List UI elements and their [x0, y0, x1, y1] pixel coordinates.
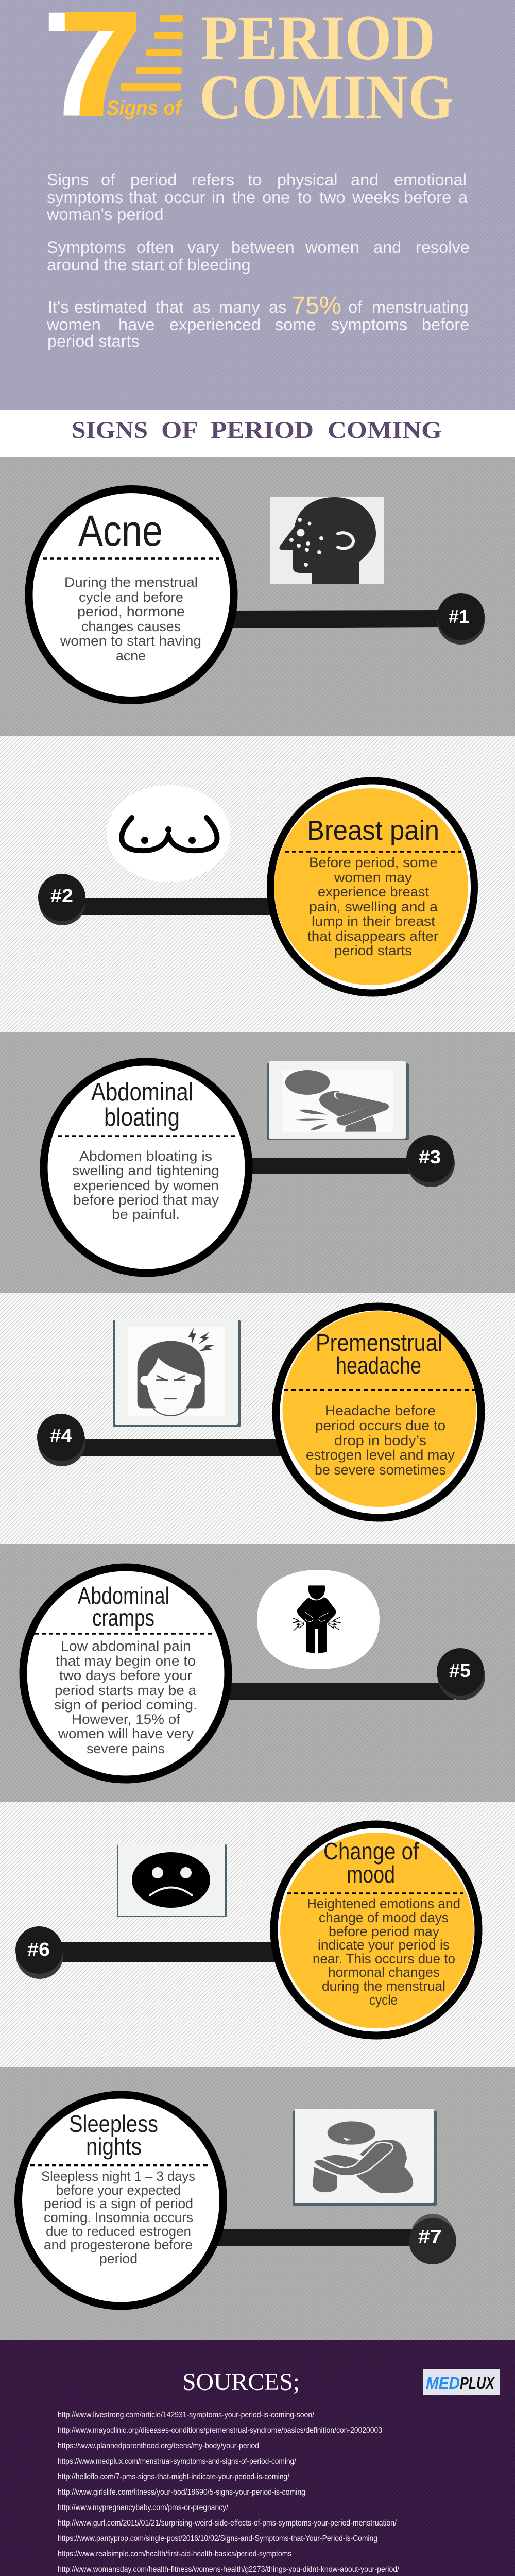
intro paragraph 3 with 75 percent highlight: as: [193, 298, 210, 316]
intro paragraph 3 with 75 percent highlight: symptoms: [331, 315, 407, 334]
body text: period is a sign of period: [44, 2196, 193, 2211]
intro paragraph 3 with 75 percent highlight: [46, 292, 469, 350]
source links list: http://www.mypregnancybaby.com/pms-or-pregnancy/: [58, 2503, 229, 2512]
body text: [60, 574, 201, 664]
circle card: acne: Acne: [78, 506, 163, 555]
circle card: sleepless nights: nights: [86, 2133, 142, 2160]
body text: that disappears after: [307, 928, 438, 944]
number badge 7: #7: [418, 2226, 442, 2247]
circle card: premenstrual headache: Premenstrual: [316, 1329, 442, 1356]
intro paragraph 2: vary: [187, 238, 219, 257]
intro paragraph 1: to: [248, 171, 262, 189]
source links list: http://www.livestrong.com/article/142931-symptoms-your-period-is-coming-soon/: [58, 2411, 315, 2419]
body text: [54, 1638, 197, 1756]
number badge 6: #6: [27, 1939, 50, 1960]
number badge 6: [15, 1926, 63, 1979]
source links list: http://www.girlslife.com/fitness/your-bod/18690/5-signs-your-period-is-coming: [58, 2488, 305, 2497]
intro paragraph 3 with 75 percent highlight: as: [269, 298, 286, 316]
body text: women may: [334, 870, 413, 885]
panel: breast pain: [0, 736, 515, 1032]
source links list: http://helloflo.com/7-pms-signs-that-might-indicate-your-period-is-coming/: [58, 2472, 290, 2481]
icon: person with cramps: [257, 1570, 380, 1669]
body text: before period that may: [73, 1192, 219, 1208]
body text: period: [99, 2251, 138, 2266]
intro paragraph 1: period: [130, 171, 177, 189]
intro paragraph 2: [47, 238, 470, 274]
intro paragraph 1: emotional: [394, 171, 467, 189]
number badge 2: [38, 874, 85, 925]
connector arm 1: [230, 610, 440, 628]
body text: near. This occurs due to: [313, 1951, 455, 1967]
icon: bloated abdomen: [267, 1061, 409, 1140]
body text: during the menstrual: [322, 1978, 445, 1994]
number badge 1: #1: [449, 606, 469, 627]
panel: change of mood: [0, 1802, 515, 2067]
intro paragraph 3 with 75 percent highlight: 75%: [291, 292, 341, 319]
intro paragraph 3 with 75 percent highlight: have: [118, 315, 154, 334]
body text: be severe sometimes: [315, 1462, 446, 1478]
intro paragraph 3 with 75 percent highlight: before: [422, 315, 469, 334]
body text: hormonal changes: [328, 1964, 440, 1980]
connector arm 4: [79, 1439, 285, 1456]
source links list: https://www.pantyprop.com/single-post/2016/10/02/Signs-and-Symptoms-that-Your-Period-is-Coming: [58, 2534, 377, 2543]
circle card: breast pain: Breast pain: [307, 815, 439, 846]
source links list: https://www.medplux.com/menstrual-symptoms-and-signs-of-period-coming/: [58, 2457, 297, 2466]
heading band: signs of period coming: PERIOD: [211, 417, 314, 444]
number badge 1: [437, 593, 485, 645]
intro paragraph 1: that: [129, 188, 157, 207]
body text: period occurs due to: [315, 1418, 445, 1433]
number badge 7: [409, 2214, 456, 2264]
circle card: premenstrual headache: [276, 1307, 481, 1518]
panel: sleepless nights: [0, 2067, 515, 2340]
connector arm 5: [227, 1683, 454, 1700]
circle card: breast pain: [270, 781, 474, 993]
source links list: http://www.mayoclinic.org/diseases-conditions/premenstrual-syndrome/basics/definition/con-20020003: [58, 2426, 382, 2435]
body text: pain, swelling and a: [309, 899, 438, 914]
body text: period starts: [334, 943, 412, 958]
circle card: abdominal bloating: Abdominal: [91, 1078, 193, 1106]
intro paragraph 1: physical: [277, 171, 337, 189]
circle card: abdominal cramps: cramps: [92, 1604, 154, 1631]
circle card: premenstrual headache: headache: [336, 1352, 421, 1379]
source links list: http://www.gurl.com/2015/01/21/surprising-weird-side-effects-of-pms-symptoms-your-period-menstruation/: [58, 2519, 397, 2528]
body text: women will have very: [58, 1726, 194, 1741]
panel: intro header: [0, 0, 515, 410]
circle card: acne: [29, 489, 234, 701]
intro paragraph 3 with 75 percent highlight: some: [275, 315, 316, 334]
body text: Before period, some: [309, 855, 438, 870]
body text: coming. Insomnia occurs: [44, 2210, 193, 2225]
intro paragraph 2: often: [136, 238, 174, 257]
body text: [72, 1148, 219, 1222]
body text: experience breast: [318, 884, 429, 900]
icon: woman with headache: [113, 1318, 241, 1427]
circle card: sleepless nights: Sleepless: [69, 2110, 158, 2137]
title: 7 signs of period coming: [43, 0, 454, 146]
number badge 5: [437, 1648, 485, 1700]
intro paragraph 1: symptoms: [47, 188, 123, 207]
signs of label: Signs of: [107, 97, 183, 120]
body text: that may begin one to: [56, 1653, 196, 1669]
circle card: abdominal bloating: bloating: [104, 1104, 180, 1131]
intro paragraph 1: and: [351, 171, 379, 189]
body text: acne: [116, 648, 146, 664]
body text: before period may: [329, 1924, 439, 1939]
intro paragraph 1: the: [232, 188, 255, 207]
body text: period starts may be a: [55, 1683, 197, 1698]
intro paragraph 1: Signs: [47, 171, 89, 189]
source links list: [58, 2411, 400, 2574]
panel: premenstrual headache: [0, 1293, 515, 1544]
body text: cycle: [369, 1992, 398, 2008]
number badge 4: #4: [50, 1425, 72, 1446]
body text: Headache before: [325, 1403, 436, 1418]
number badge 4: [37, 1414, 85, 1466]
connector arm 6: [61, 1942, 277, 1962]
body text: cycle and before: [79, 589, 183, 605]
body text: [306, 1403, 455, 1478]
intro paragraph 1: weeks: [352, 188, 400, 207]
number badge 2: #2: [50, 885, 73, 906]
intro paragraph 2: and: [373, 238, 401, 257]
icon: sad face: [117, 1843, 227, 1917]
circle card: abdominal cramps: [23, 1567, 228, 1780]
source links list: http://www.womansday.com/health-fitness/womens-health/g2273/things-you-didnt-know-about-your-period/: [58, 2565, 400, 2574]
panel: sources: [0, 2340, 515, 2576]
intro paragraph 2: between: [231, 238, 295, 257]
logo: medplux: [423, 2369, 500, 2395]
intro paragraph 1: to: [298, 188, 312, 207]
body text: Sleepless night 1 – 3 days: [41, 2168, 195, 2184]
body text: and progesterone before: [44, 2237, 193, 2252]
circle card: change of mood: [274, 1824, 478, 2036]
intro paragraph 1: of: [101, 171, 115, 189]
body text: estrogen level and may: [306, 1447, 455, 1463]
decorative bars beside numeral: [121, 15, 183, 91]
intro paragraph 3 with 75 percent highlight: menstruating: [372, 298, 469, 316]
number badge 3: [406, 1135, 455, 1187]
body text: experienced by women: [73, 1178, 219, 1193]
body text: severe pains: [87, 1741, 165, 1756]
body text: [307, 1896, 460, 2008]
body text: drop in body’s: [334, 1433, 426, 1448]
panel: abdominal bloating: [0, 1032, 515, 1293]
intro paragraph 3 with 75 percent highlight: many: [219, 298, 260, 316]
intro paragraph 1: before: [404, 188, 451, 207]
body text: Low abdominal pain: [61, 1638, 191, 1654]
intro paragraph 1: two: [319, 188, 346, 207]
intro paragraph 1: one: [262, 188, 290, 207]
circle card: change of mood: Change of: [323, 1838, 419, 1865]
intro paragraph 1: a: [458, 188, 468, 207]
intro paragraph 3 with 75 percent highlight: It's: [48, 298, 69, 316]
intro paragraph 1: in: [212, 188, 225, 207]
circle card: abdominal bloating: [44, 1062, 249, 1273]
body text: women to start having: [60, 633, 201, 649]
body text: lump in their breast: [312, 913, 436, 929]
intro paragraph 3 with 75 percent highlight: of: [348, 298, 363, 316]
icon: breasts: [107, 785, 230, 882]
intro paragraph 3 with 75 percent highlight: estimated: [74, 298, 147, 316]
heading band: signs of period coming: OF: [161, 417, 198, 444]
body text: Abdomen bloating is: [79, 1148, 212, 1164]
heading band: signs of period coming: SIGNS: [72, 417, 148, 444]
body text: two days before your: [59, 1668, 192, 1683]
body text: change of mood days: [319, 1910, 449, 1925]
intro paragraph 1: woman's period: [46, 205, 164, 224]
intro paragraph 2: resolve: [416, 238, 470, 257]
panel: abdominal cramps: [0, 1544, 515, 1802]
body text: indicate your period is: [318, 1937, 450, 1953]
intro paragraph 3 with 75 percent highlight: that: [156, 298, 183, 316]
connector arm 2: [79, 898, 274, 915]
circle card: change of mood: mood: [347, 1861, 395, 1888]
body text: However, 15% of: [72, 1711, 181, 1727]
body text: before your expected: [56, 2182, 181, 2198]
coming heading: COMING: [199, 62, 454, 132]
logo: medplux: PLUX: [460, 2374, 495, 2393]
body text: [41, 2168, 195, 2266]
intro paragraph 1: refers: [192, 171, 234, 189]
body text: Heightened emotions and: [307, 1896, 460, 1911]
panel: acne: [0, 457, 515, 736]
body text: sign of period coming.: [54, 1697, 197, 1713]
intro paragraph 3 with 75 percent highlight: experienced: [169, 315, 261, 334]
intro paragraph 2: women: [305, 238, 359, 257]
number badge 5: #5: [449, 1660, 471, 1681]
body text: be painful.: [112, 1207, 180, 1222]
period heading: PERIOD: [201, 3, 435, 73]
intro paragraph 2: Symptoms: [47, 238, 126, 257]
circle card: sleepless nights: [19, 2095, 224, 2306]
body text: due to reduced estrogen: [46, 2224, 191, 2239]
sources heading: SOURCES;: [182, 2368, 300, 2396]
intro paragraph 1: [46, 171, 468, 224]
intro paragraph 2: around the start of bleeding: [47, 256, 251, 274]
circle card: abdominal cramps: Abdominal: [78, 1582, 169, 1609]
heading band: signs of period coming: [0, 410, 515, 457]
source links list: https://www.realsimple.com/health/first-aid-health-basics/period-symptoms: [58, 2550, 291, 2558]
connector arm 3: [247, 1158, 412, 1174]
icon: face with acne: [270, 497, 384, 584]
body text: period, hormone: [77, 604, 185, 619]
logo: medplux: MED: [426, 2374, 460, 2393]
heading band: signs of period coming: COMING: [328, 417, 442, 444]
body text: swelling and tightening: [72, 1163, 219, 1178]
connector arm 7: [217, 2229, 427, 2246]
intro paragraph 1: occur: [164, 188, 205, 207]
icon: sleepless person: [293, 2109, 437, 2206]
number badge 3: #3: [419, 1146, 441, 1167]
intro paragraph 3 with 75 percent highlight: women: [46, 315, 101, 334]
body text: [307, 855, 438, 958]
body text: During the menstrual: [64, 574, 198, 590]
intro paragraph 3 with 75 percent highlight: period starts: [47, 332, 140, 350]
source links list: https://www.plannedparenthood.org/teens/my-body/your-period: [58, 2442, 259, 2450]
body text: changes causes: [81, 619, 181, 634]
